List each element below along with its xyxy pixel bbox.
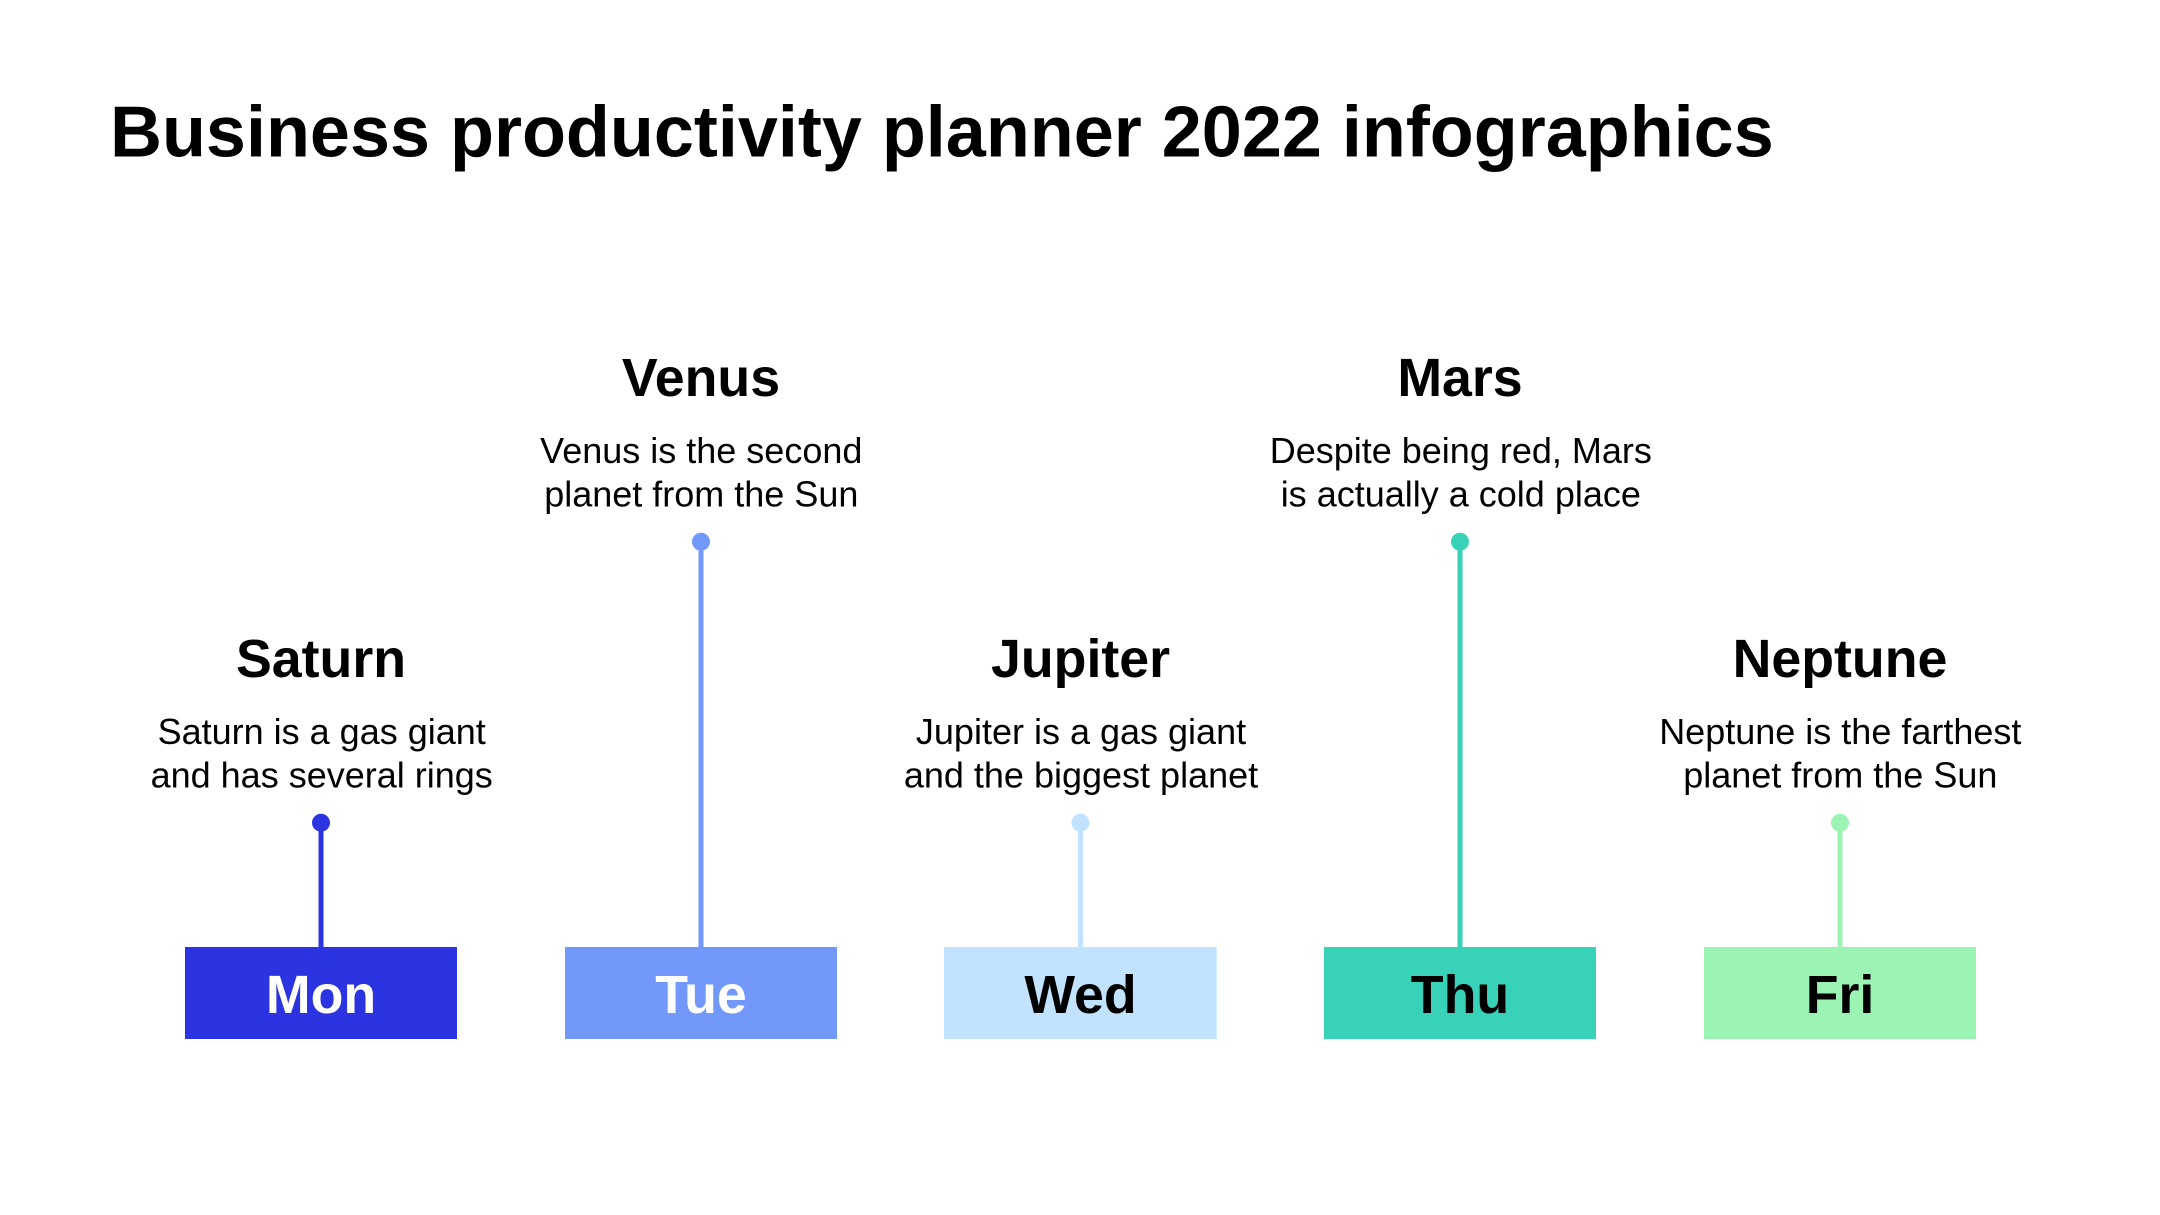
label: Mon: Mon — [266, 965, 376, 1025]
text: Jupiter description: and the biggest planet — [904, 754, 1258, 796]
label: Fri — [1704, 947, 1976, 1039]
label: Tue — [565, 947, 837, 1039]
label: Wed: Wed — [1024, 965, 1137, 1025]
label: Tue: Tue — [655, 965, 747, 1025]
heading: Jupiter: Jupiter — [991, 629, 1170, 689]
text: Neptune description: Neptune is the farthest — [1659, 711, 2021, 752]
connector: Jupiter pin — [1072, 814, 1090, 948]
column: Monday Saturn — [151, 629, 493, 1039]
column: Tuesday Venus — [540, 348, 862, 1039]
column: Thursday Mars — [1270, 348, 1652, 1039]
connector: Neptune pin — [1831, 814, 1849, 948]
heading: Mars: Mars — [1397, 348, 1523, 408]
label: Mon — [185, 947, 457, 1039]
label: Thu — [1324, 947, 1596, 1039]
connector: Saturn pin — [312, 814, 330, 948]
text: Jupiter description: Jupiter is a gas giant — [916, 711, 1246, 752]
text: Mars description: Despite being red, Mars — [1270, 430, 1652, 471]
text: Neptune description: planet from the Sun — [1683, 754, 1997, 796]
heading: Venus: Venus — [622, 348, 780, 408]
column: Friday Neptune — [1659, 629, 2021, 1039]
title: Business productivity planner 2022 infographics — [110, 92, 1774, 172]
text: Mars description: is actually a cold place — [1281, 474, 1641, 514]
text: Venus description: Venus is the second — [540, 430, 862, 471]
heading: Neptune: Neptune — [1733, 629, 1947, 689]
column: Wednesday Jupiter — [904, 629, 1258, 1039]
text: Saturn description: Saturn is a gas giant — [158, 711, 486, 752]
connector: Mars pin — [1451, 533, 1469, 948]
label: Fri: Fri — [1806, 965, 1874, 1025]
connector: Venus pin — [692, 533, 710, 948]
text: Venus description: planet from the Sun — [544, 474, 858, 514]
text: Saturn description: and has several rings — [151, 754, 493, 796]
label: Thu: Thu — [1411, 965, 1509, 1025]
heading: Saturn: Saturn — [236, 629, 406, 689]
label: Wed — [944, 947, 1217, 1039]
